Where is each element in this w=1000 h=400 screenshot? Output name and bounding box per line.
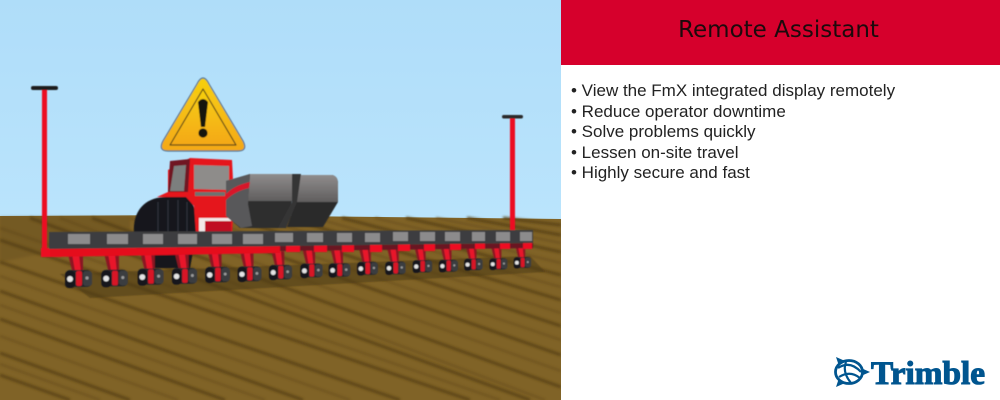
bullet list: • View the FmX integrated display remotely <box>571 81 895 100</box>
right GPS mast <box>502 115 523 230</box>
Trimble logo <box>834 356 985 392</box>
field with furrows <box>0 215 561 400</box>
icon: Trimble globe <box>836 357 870 387</box>
heading bar <box>561 0 996 65</box>
wordmark: Trimble <box>871 356 985 392</box>
bullet list: • Lessen on-site travel <box>571 142 739 162</box>
tractor <box>134 158 234 268</box>
bullet list: • Highly secure and fast <box>571 163 750 182</box>
heading bar: Remote Assistant <box>678 17 879 43</box>
illustration panel: planter in field <box>0 0 561 400</box>
sky <box>0 0 561 220</box>
seed hoppers <box>226 174 338 228</box>
bullet list <box>571 81 896 182</box>
row units <box>65 247 531 288</box>
planter shadow <box>60 256 545 298</box>
warning triangle icon <box>161 78 245 151</box>
left GPS mast <box>31 86 61 257</box>
bullet list: • Reduce operator downtime <box>571 102 786 120</box>
planter toolbar <box>49 230 533 257</box>
bullet list: • Solve problems quickly <box>571 122 756 141</box>
